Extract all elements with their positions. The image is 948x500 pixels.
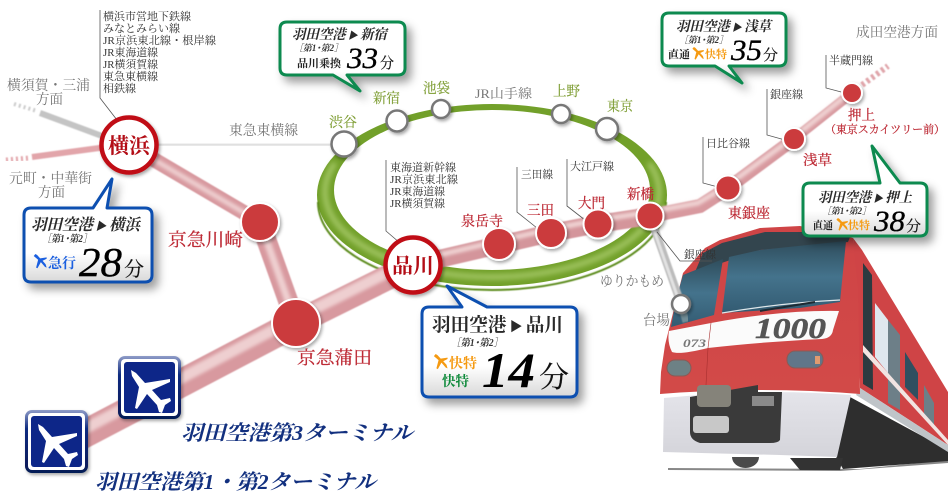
station: Yokohama bbox=[102, 118, 156, 172]
station labels: Yamanote green: 渋谷 bbox=[329, 115, 357, 131]
station labels: Yamanote green: 東京 bbox=[607, 98, 633, 115]
station labels: Yamanote green bbox=[329, 80, 633, 131]
callout: Yokohama 28 min: 急行 bbox=[48, 255, 76, 272]
callout: Oshiage 38 min: 38 bbox=[873, 205, 905, 238]
callout: Shinjuku 33 min: 分 bbox=[380, 55, 394, 72]
callout: Shinagawa 14 min bbox=[422, 286, 577, 398]
callout: Shinagawa 14 min: 快特 bbox=[442, 373, 469, 390]
callout: Asakusa 35 min: 35 bbox=[730, 34, 762, 67]
callout: Oshiage 38 min: 羽田空港 ▶ 押上 bbox=[818, 190, 913, 206]
station labels: red: 泉岳寺 bbox=[461, 213, 503, 230]
callout: Shinjuku 33 min: 33 bbox=[346, 42, 378, 75]
gray line and direction labels: 方面 bbox=[38, 184, 65, 201]
transfer list: Yokohama: JR横須賀線 bbox=[103, 57, 158, 71]
station labels: red: 新橋 bbox=[627, 186, 654, 203]
line: Yokosuka direction bbox=[14, 104, 129, 146]
train ground shadow bbox=[668, 460, 948, 471]
callout: Asakusa 35 min: ［第1･第2］ bbox=[679, 35, 728, 45]
white band bbox=[668, 311, 839, 353]
callout: Oshiage 38 min: 快特 bbox=[848, 218, 870, 232]
callout: Shinagawa 14 min: 快特 bbox=[449, 355, 477, 372]
train underbody bbox=[835, 397, 948, 469]
callout: Yokohama 28 min: 分 bbox=[124, 258, 144, 281]
windshield main pane bbox=[722, 241, 846, 313]
transfer labels: others: 半蔵門線 bbox=[829, 53, 873, 67]
transfer labels: others bbox=[521, 53, 873, 261]
transfer list: Yokohama: JR東海道線 bbox=[103, 46, 158, 59]
label: terminal 3: 羽田空港第3ターミナル bbox=[181, 421, 416, 445]
gray line and direction labels: 成田空港方面 bbox=[856, 24, 938, 41]
gray line and direction labels bbox=[7, 24, 938, 329]
transfer list: Shinagawa: JR京浜東北線 bbox=[390, 173, 458, 186]
transfer list: Shinagawa: 東海道新幹線 bbox=[390, 160, 456, 174]
transfer list: Yokohama: JR京浜東北線・根岸線 bbox=[103, 33, 216, 47]
callout: Shinagawa 14 min: 14 bbox=[482, 342, 535, 398]
number 073: 073 bbox=[683, 336, 706, 350]
train: Keikyu 1000 bbox=[660, 226, 948, 471]
transfer labels: others: 三田線 bbox=[521, 168, 553, 181]
white skirt bbox=[663, 392, 851, 457]
windshield left pane bbox=[671, 259, 723, 327]
line: Toyoko bbox=[129, 144, 344, 145]
train side body bbox=[853, 238, 948, 445]
transfer list: Shinagawa: JR東海道線 bbox=[390, 185, 445, 198]
transfer list: Yokohama bbox=[103, 9, 216, 95]
station: Shinagawa: 品川 bbox=[392, 254, 434, 278]
callout: Shinjuku 33 min bbox=[280, 22, 405, 91]
transfer list: Yokohama: 相鉄線 bbox=[103, 81, 136, 95]
callout: Asakusa 35 min: 分 bbox=[763, 47, 778, 64]
callout: Asakusa 35 min bbox=[662, 13, 786, 83]
line: Yurikamome bbox=[649, 216, 686, 322]
number 1000: 1000 bbox=[755, 314, 826, 345]
line: Motomachi direction bbox=[6, 144, 129, 160]
callout: Asakusa 35 min: 羽田空港 ▶ 浅草 bbox=[676, 19, 774, 35]
station labels: red: 押上 bbox=[848, 107, 875, 124]
transfer list: Yokohama: みなとみらい線 bbox=[103, 22, 180, 35]
station: Yokohama: 横浜 bbox=[108, 134, 151, 158]
callout: Asakusa 35 min: 快特 bbox=[705, 47, 727, 61]
gray line and direction labels: 台場 bbox=[643, 313, 670, 329]
station markers: transfer white bbox=[332, 100, 690, 313]
leader lines bbox=[100, 10, 845, 261]
gray line and direction labels: JR山手線 bbox=[475, 86, 532, 101]
transfer labels: others: 銀座線 bbox=[770, 88, 803, 101]
station markers: Keikyu bbox=[241, 83, 862, 347]
callout: Shinjuku 33 min: 羽田空港 ▶ 新宿 bbox=[292, 27, 389, 43]
station labels: Yamanote green: 上野 bbox=[553, 84, 580, 100]
train front red bbox=[660, 226, 860, 394]
train side door and windows bbox=[863, 263, 948, 445]
transfer list: Shinagawa bbox=[390, 160, 458, 210]
gray line and direction labels: 横須賀・三浦 bbox=[7, 77, 90, 94]
station: Shinagawa bbox=[386, 238, 440, 292]
line: Keikyu main red tube bbox=[50, 66, 888, 452]
callout: Oshiage 38 min: 直通 bbox=[813, 218, 833, 232]
callout: Shinjuku 33 min: ［第1･第2］ bbox=[294, 43, 343, 53]
transfer list: Yokohama: 横浜市営地下鉄線 bbox=[103, 9, 191, 23]
transfer labels: others: 大江戸線 bbox=[570, 159, 614, 173]
transfer list: Yokohama: 東急東横線 bbox=[103, 69, 158, 83]
callout: Shinagawa 14 min: 羽田空港 ▶ 品川 bbox=[432, 314, 563, 336]
station labels: red: 京急蒲田 bbox=[297, 348, 372, 368]
icon: airport terminal 1-2 bbox=[25, 410, 88, 473]
station labels: red: 浅草 bbox=[803, 152, 832, 169]
head lights bbox=[667, 360, 691, 376]
transfer list: Shinagawa: JR横須賀線 bbox=[390, 196, 445, 210]
gray line and direction labels: 東急東横線 bbox=[229, 122, 298, 139]
callout: Yokohama 28 min bbox=[24, 179, 152, 285]
coupler bbox=[690, 385, 782, 443]
callout: Yokohama 28 min: ［第1･第2］ bbox=[42, 233, 92, 245]
label: terminal 1-2: 羽田空港第1・第2ターミナル bbox=[95, 470, 379, 494]
station labels: red: 大門 bbox=[578, 195, 605, 212]
callout: Asakusa 35 min: 直通 bbox=[668, 47, 690, 61]
callout: Yokohama 28 min: 28 bbox=[79, 239, 123, 285]
station labels: red: 京急川崎 bbox=[168, 230, 243, 250]
callout: Shinagawa 14 min: 分 bbox=[539, 361, 569, 394]
gray line and direction labels: ゆりかもめ bbox=[600, 274, 664, 290]
callout: Shinjuku 33 min: 品川乗換 bbox=[297, 56, 341, 70]
transfer labels: others: 銀座線 bbox=[684, 248, 716, 261]
gray line and direction labels: 元町・中華街 bbox=[9, 170, 92, 187]
station labels: red: 三田 bbox=[527, 203, 554, 219]
callout: Oshiage 38 min: 分 bbox=[906, 218, 921, 235]
station labels: Yamanote green: 池袋 bbox=[423, 80, 450, 97]
callout: Shinagawa 14 min: ［第1･第2］ bbox=[451, 337, 503, 349]
callout: Oshiage 38 min: ［第1･第2］ bbox=[822, 206, 871, 216]
line: Yamanote ring bbox=[317, 104, 667, 290]
train side skirt bbox=[856, 388, 948, 452]
transfer labels: others: 日比谷線 bbox=[706, 136, 750, 150]
station labels: red bbox=[168, 107, 945, 368]
gray line and direction labels: 方面 bbox=[36, 91, 63, 108]
callout: Yokohama 28 min: 羽田空港 ▶ 横浜 bbox=[31, 216, 142, 234]
roof dark bbox=[695, 232, 852, 272]
station labels: red: 東銀座 bbox=[728, 205, 770, 222]
wheels bbox=[732, 457, 759, 468]
icon: airport terminal 3 bbox=[118, 356, 181, 419]
station labels: Yamanote green: 新宿 bbox=[373, 90, 400, 107]
station labels: red: （東京スカイツリー前） bbox=[825, 122, 945, 136]
callout: Oshiage 38 min bbox=[803, 146, 927, 238]
